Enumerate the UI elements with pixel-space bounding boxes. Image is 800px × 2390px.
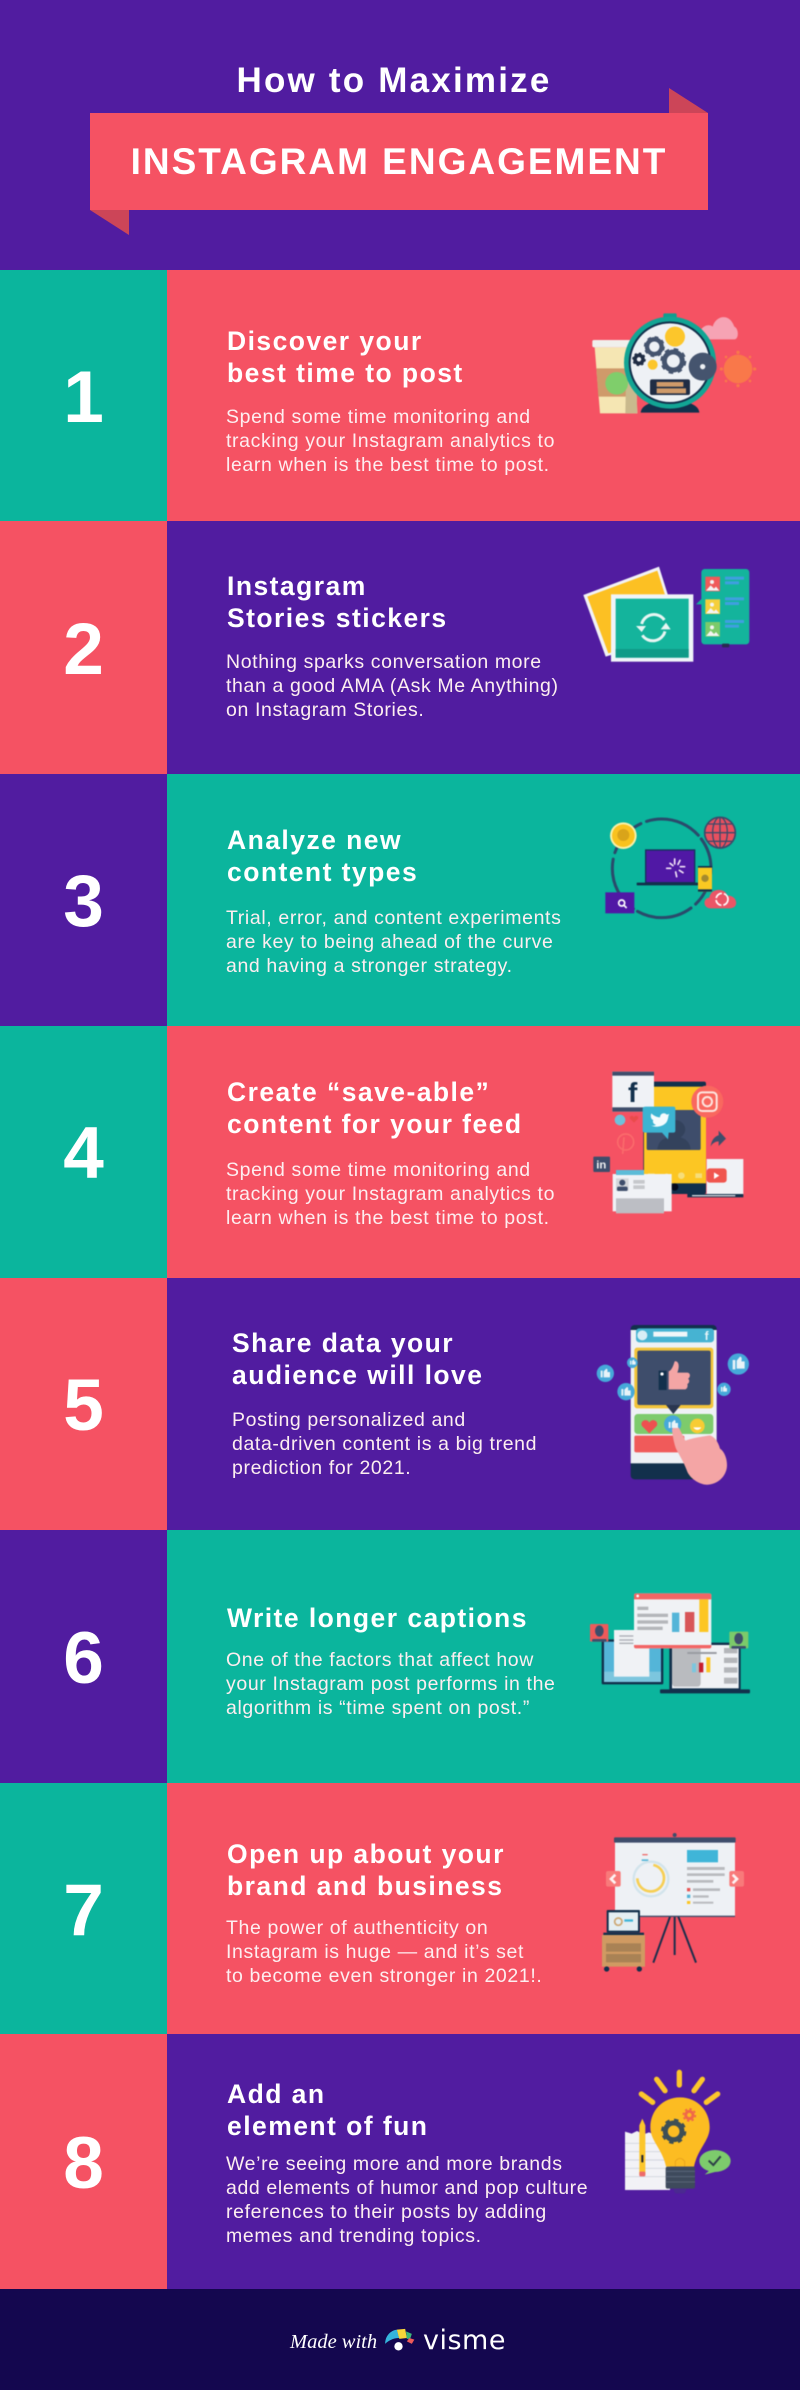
heading 5: Share data your [232,1328,454,1358]
heading 2: Stories stickers [227,603,448,633]
icon: light bulb with gears and pencil [624,2069,732,2194]
body 4: tracking your Instagram analytics to [226,1183,555,1205]
body 5: data-driven content is a big trend [232,1433,537,1455]
icon: phone with social media logos: f [628,1077,638,1108]
heading 2: Instagram [227,571,367,601]
number 5: 5 [63,1365,104,1446]
heading 3: content types [227,857,418,887]
body 8: references to their posts by adding [226,2201,547,2223]
body 6: One of the factors that affect how [226,1649,534,1671]
footer script text: Made with [290,2331,377,2353]
number 8: 8 [63,2122,104,2204]
number 8 [0,2034,167,2289]
icon: visme logo [385,2328,414,2350]
body 6: algorithm is “time spent on post.” [226,1697,530,1719]
heading 1: best time to post [227,358,464,388]
body 6 [226,1649,556,1719]
heading 4: content for your feed [227,1109,522,1139]
body 4: learn when is the best time to post. [226,1207,550,1229]
body 7: The power of authenticity on [226,1917,488,1939]
number 3 [0,774,167,1026]
body 7 [226,1917,542,1987]
icon: coffee cup and gear clock [592,312,756,414]
number 4 [0,1026,167,1278]
heading 5 [232,1328,483,1390]
body 5 [232,1409,537,1479]
panel: step 1 [0,270,800,521]
icon: content cycle with laptop [604,816,737,920]
ribbon fold bottom left [90,210,129,235]
number 1 [0,270,167,521]
heading 4: Create “save-able” [227,1077,490,1107]
body 2: on Instagram Stories. [226,699,424,721]
body 7: to become even stronger in 2021!. [226,1965,542,1987]
body 2 [226,651,559,721]
body 3: Trial, error, and content experiments [226,907,561,929]
body 1: learn when is the best time to post. [226,454,550,476]
body 1: tracking your Instagram analytics to [226,430,555,452]
panel: step 7 [0,1783,800,2034]
heading 4 [227,1077,522,1139]
number 7: 7 [63,1870,104,1950]
heading 3: Analyze new [227,825,402,855]
panel: step 3 [0,774,800,1026]
number 1: 1 [63,356,104,438]
body 8 [226,2153,588,2247]
body 3: and having a stronger strategy. [226,955,513,977]
number 2: 2 [63,608,104,690]
header panel [90,66,708,235]
title ribbon: INSTAGRAM ENGAGEMENT [131,141,667,182]
icon: windows, tablet and laptop with charts [589,1592,751,1694]
heading 8 [227,2079,428,2141]
body 8: memes and trending topics. [226,2225,482,2247]
heading 7 [227,1839,505,1901]
number 6 [0,1530,167,1783]
heading 5: audience will love [232,1360,483,1390]
title line 1: How to Maximize [236,61,551,100]
number 5 [0,1278,167,1530]
icon: phone with like reactions [596,1324,750,1486]
heading 3 [227,825,418,887]
icon: phone with social media logos [592,1070,744,1214]
title ribbon [90,113,708,210]
body 4 [226,1159,555,1229]
body 8: add elements of humor and pop culture [226,2177,588,2199]
body 1 [226,406,555,476]
heading 2 [227,571,448,633]
panel: step 4 [0,1026,800,1278]
body 7: Instagram is huge — and it’s set [226,1941,524,1963]
heading 8: element of fun [227,2111,428,2141]
body 3: are key to being ahead of the curve [226,931,553,953]
body 3 [226,907,561,977]
body 5: Posting personalized and [232,1409,466,1431]
icon: photos and sticker list [582,566,750,662]
icon: phone with like reactions: f [705,1329,710,1343]
heading 6: Write longer captions [227,1603,528,1633]
heading 1 [227,326,464,388]
panel: step 2 [0,521,800,774]
body 2: than a good AMA (Ask Me Anything) [226,675,559,697]
body 1: Spend some time monitoring and [226,406,531,428]
heading 8: Add an [227,2079,326,2109]
panel: step 6 [0,1530,800,1783]
body 8: We’re seeing more and more brands [226,2153,563,2175]
number 6: 6 [63,1618,104,1698]
panel: step 5 [0,1278,800,1530]
footer brand wordmark: visme [423,2325,506,2356]
number 2 [0,521,167,774]
number 7 [0,1783,167,2034]
ribbon fold top right [669,88,708,113]
body 2: Nothing sparks conversation more [226,651,542,673]
heading 7: Open up about your [227,1839,505,1869]
body 4: Spend some time monitoring and [226,1159,531,1181]
body 6: your Instagram post performs in the [226,1673,556,1695]
footer [0,2289,800,2390]
icon: phone with social media logos: in [596,1160,606,1172]
panel: step 8 [0,2034,800,2289]
icon: presentation board with laptop and desk [602,1832,744,1972]
body 5: prediction for 2021. [232,1457,411,1479]
number 4: 4 [63,1113,104,1194]
heading 1: Discover your [227,326,423,356]
number 3: 3 [63,861,104,942]
heading 7: brand and business [227,1871,503,1901]
